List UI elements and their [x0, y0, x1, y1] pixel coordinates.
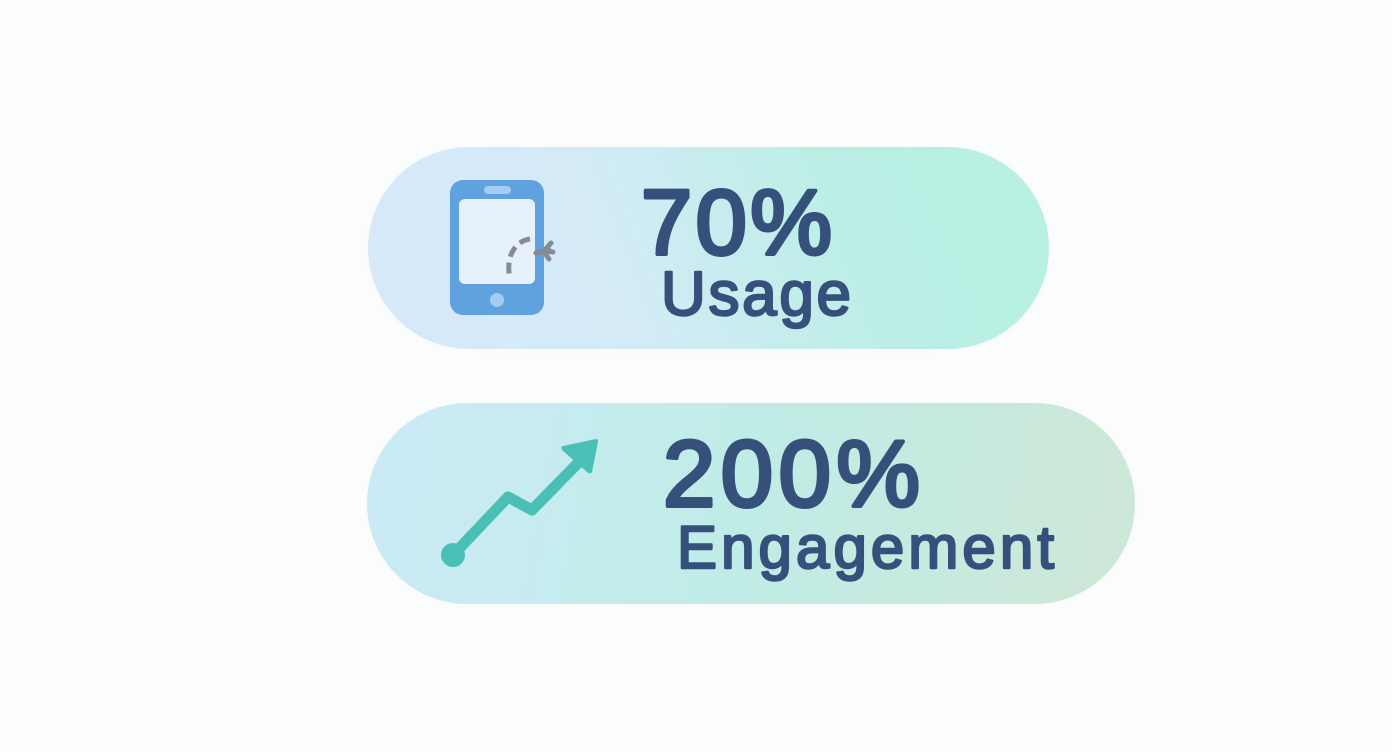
- stat: 70%: 70%: [641, 172, 832, 274]
- label: Usage: Usage: [661, 260, 851, 329]
- icon: growth arrow: [441, 439, 598, 567]
- engagement pill background: [367, 403, 1135, 604]
- panel: engagement: [361, 399, 1141, 609]
- stat: 200%: 200%: [663, 421, 920, 526]
- usage pill background: [368, 147, 1049, 349]
- icon: phone: [450, 180, 553, 315]
- panel: usage: [362, 143, 1054, 355]
- label: Engagement: Engagement: [677, 514, 1054, 581]
